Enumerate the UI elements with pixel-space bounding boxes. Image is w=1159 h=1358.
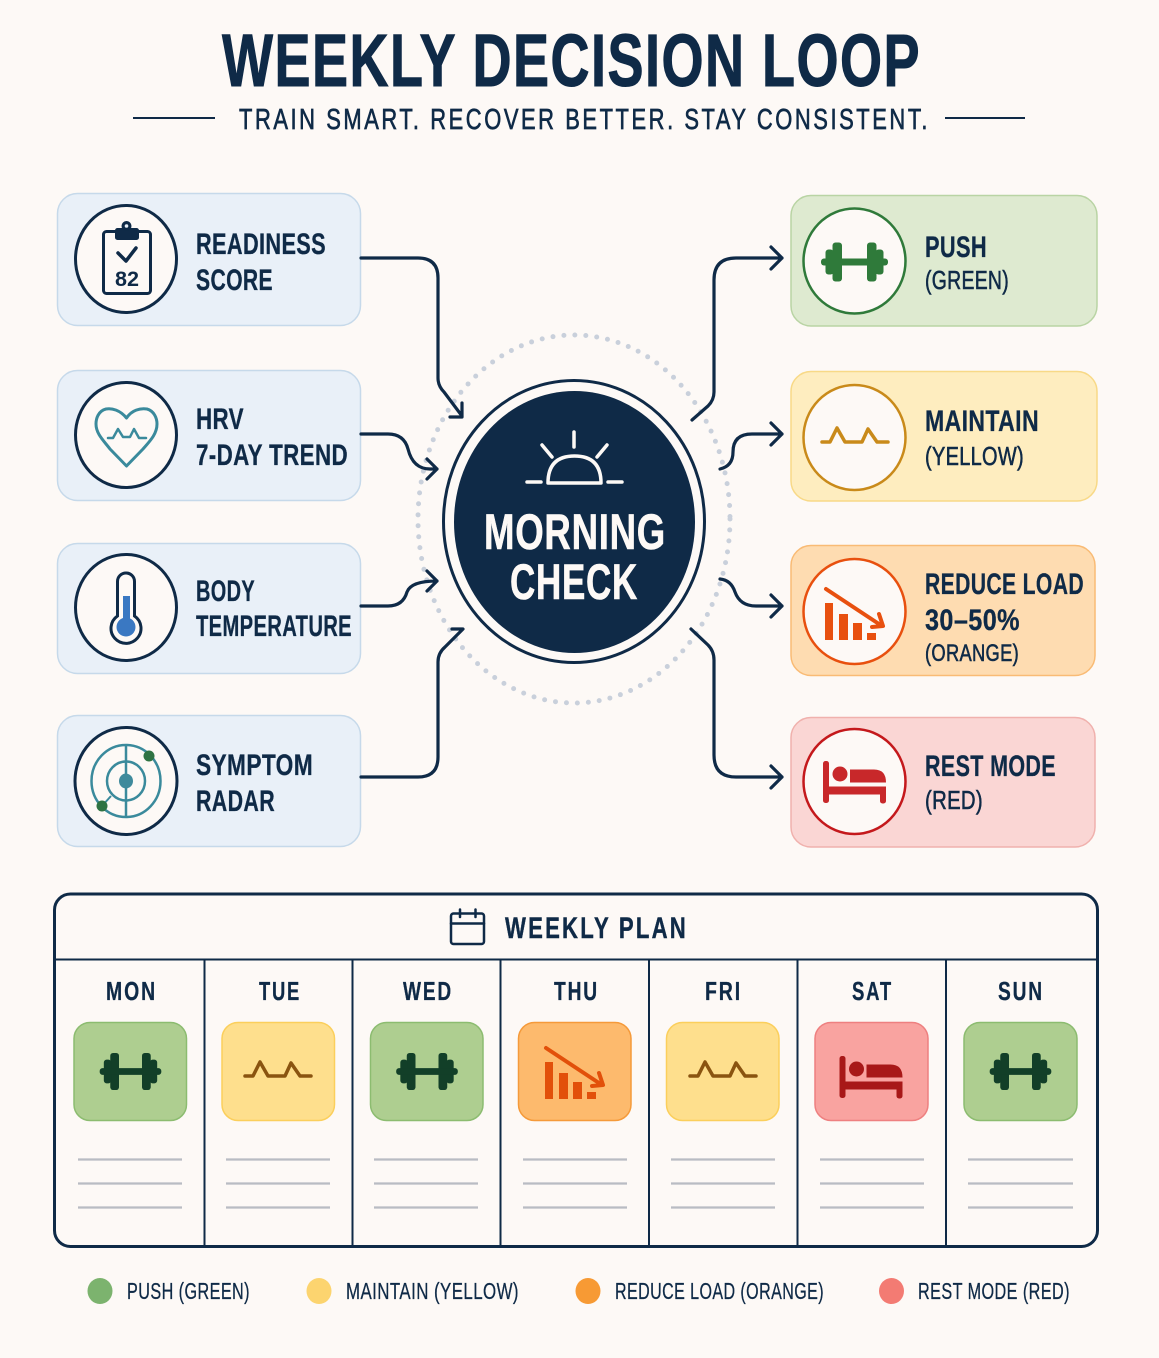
- hub label: [484, 504, 666, 610]
- label: push: [925, 231, 1009, 295]
- panel: reduce load: [791, 546, 1095, 676]
- icon: calendar: [451, 910, 484, 944]
- icon: falling bars: [804, 559, 906, 664]
- label: rest mode: (RED): [925, 785, 983, 815]
- day: sunday: [964, 976, 1077, 1208]
- day: saturday: [815, 976, 928, 1208]
- label: body temperature: [196, 575, 352, 643]
- panel: weekly plan: [54, 894, 1098, 1246]
- label: rest mode: [925, 750, 1056, 815]
- icon: flat pulse: [804, 385, 906, 490]
- label: hrv 7-day trend: HRV: [196, 403, 244, 436]
- label: push: PUSH: [925, 231, 987, 264]
- subtitle: TRAIN SMART. RECOVER BETTER. STAY CONSISTENT.: [239, 104, 930, 136]
- label: body temperature: BODY: [196, 575, 255, 608]
- legend item: reduce load: REDUCE LOAD (ORANGE): [615, 1278, 824, 1304]
- arrow: morning check to maintain: [720, 423, 782, 469]
- day: sunday: SUN: [998, 976, 1044, 1006]
- label: readiness score: SCORE: [196, 264, 273, 297]
- label: maintain: [925, 405, 1039, 471]
- panel: readiness score: [58, 194, 360, 326]
- hub label: MORNING: [484, 504, 666, 560]
- arrow: morning check to push: [692, 247, 782, 420]
- label: hrv 7-day trend: [196, 403, 348, 472]
- label: symptom radar: [196, 749, 313, 818]
- legend item: maintain: [306, 1278, 519, 1304]
- icon: clipboard score: 82: [115, 268, 139, 291]
- label: body temperature: TEMPERATURE: [196, 610, 352, 643]
- panel: push: [791, 196, 1097, 326]
- morning check hub: [444, 380, 704, 662]
- day: thursday: THU: [554, 976, 599, 1006]
- heading: weekly plan: WEEKLY PLAN: [505, 912, 688, 945]
- icon: barbell: [804, 208, 906, 314]
- label: symptom radar: SYMPTOM: [196, 749, 313, 782]
- icon: clipboard score: [76, 206, 176, 312]
- hub label: CHECK: [510, 554, 638, 610]
- day: thursday: [518, 976, 631, 1208]
- day: saturday: SAT: [852, 976, 893, 1006]
- day: monday: [74, 976, 186, 1208]
- label: reduce load: [925, 568, 1084, 667]
- arrow: morning check to reduce load: [720, 579, 782, 617]
- icon: bed: [804, 729, 906, 834]
- legend item: rest mode: [879, 1278, 1070, 1304]
- panel: maintain: [791, 372, 1097, 501]
- dotted ring: [418, 335, 730, 703]
- day: friday: [666, 976, 779, 1208]
- label: hrv 7-day trend: 7-DAY TREND: [196, 439, 348, 472]
- panel: hrv 7-day trend: [58, 370, 360, 500]
- arrow: readiness to morning check: [361, 258, 462, 417]
- label: maintain: (YELLOW): [925, 441, 1024, 471]
- label: maintain: MAINTAIN: [925, 405, 1039, 438]
- arrow: morning check to rest mode: [691, 629, 782, 788]
- label: reduce load: 30–50%: [925, 604, 1020, 637]
- arrow: symptom radar to morning check: [361, 629, 463, 777]
- day: monday: MON: [106, 976, 157, 1006]
- icon: thermometer: [76, 554, 176, 660]
- panel: body temperature: [58, 544, 360, 674]
- legend item: push: [88, 1278, 250, 1304]
- label: symptom radar: RADAR: [196, 785, 275, 818]
- label: reduce load: (ORANGE): [925, 640, 1019, 667]
- day: tuesday: TUE: [259, 976, 301, 1006]
- day: tuesday: [222, 976, 334, 1208]
- panel: rest mode: [791, 718, 1095, 847]
- legend item: rest mode: REST MODE (RED): [918, 1278, 1070, 1304]
- icon: sunrise: [527, 432, 622, 483]
- title: WEEKLY DECISION LOOP: [222, 19, 921, 102]
- legend: [88, 1278, 1070, 1304]
- icon: heart pulse: [76, 382, 176, 488]
- label: push: (GREEN): [925, 265, 1009, 295]
- label: readiness score: [196, 228, 326, 297]
- label: readiness score: READINESS: [196, 228, 326, 261]
- arrow: temperature to morning check: [361, 571, 437, 606]
- legend item: maintain: MAINTAIN (YELLOW): [346, 1278, 519, 1304]
- day: wednesday: [370, 976, 483, 1208]
- label: reduce load: REDUCE LOAD: [925, 568, 1084, 601]
- legend item: reduce load: [576, 1278, 824, 1304]
- arrow: hrv to morning check: [361, 434, 437, 479]
- label: rest mode: REST MODE: [925, 750, 1056, 783]
- legend item: push: PUSH (GREEN): [127, 1278, 250, 1304]
- panel: symptom radar: [58, 716, 360, 846]
- day: wednesday: WED: [403, 976, 453, 1006]
- icon: radar: [75, 728, 177, 834]
- day: friday: FRI: [705, 976, 742, 1006]
